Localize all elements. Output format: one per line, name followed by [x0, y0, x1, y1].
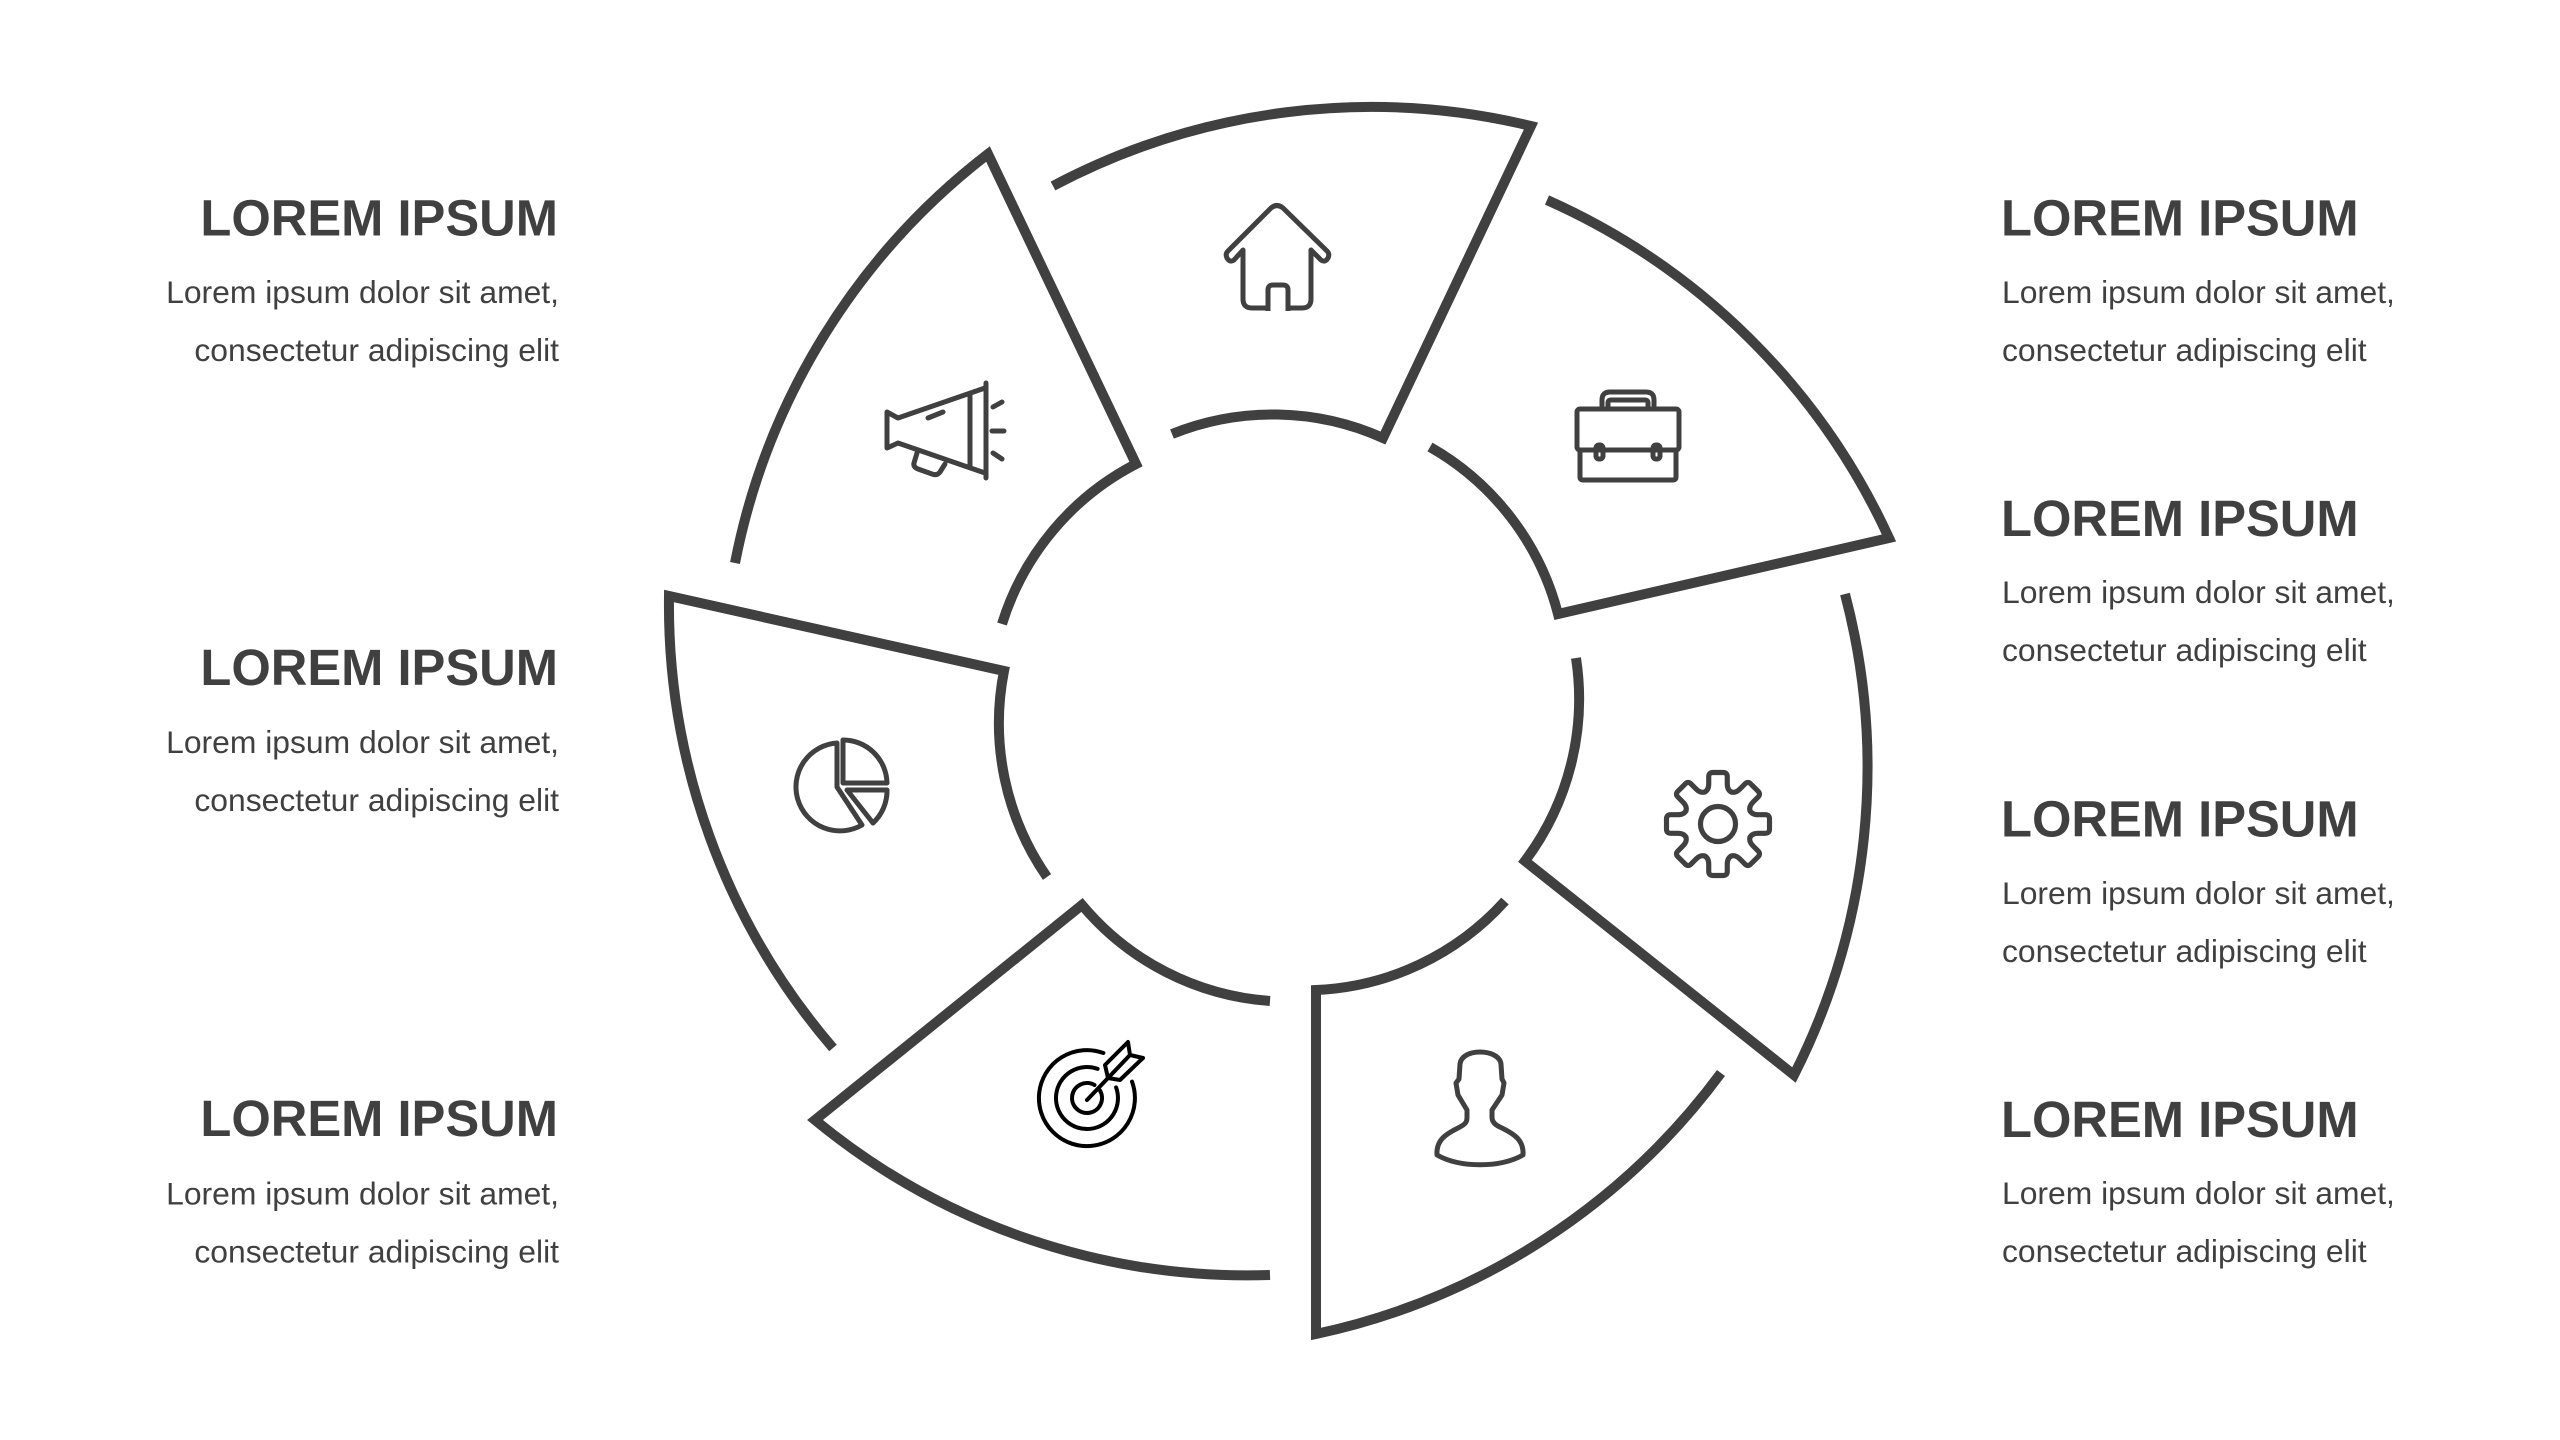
text block: left middle: LOREM IPSUM: [200, 639, 558, 696]
text block: left bottom: LOREM IPSUM: [200, 1090, 558, 1147]
panel: segment pie: [669, 596, 1047, 1048]
icon: house: [1226, 206, 1329, 311]
text block: left top: consectetur adipiscing elit: [194, 332, 559, 368]
text block: left bottom: [166, 1090, 559, 1270]
text block: right 3: consectetur adipiscing elit: [2002, 933, 2367, 969]
text block: right 4: Lorem ipsum dolor sit amet,: [2002, 1175, 2395, 1211]
text block: left top: [166, 190, 559, 368]
panel: segment briefcase: [1430, 200, 1889, 614]
text block: right 4: [2001, 1091, 2395, 1269]
text block: right 2: Lorem ipsum dolor sit amet,: [2002, 574, 2395, 610]
text block: right 2: LOREM IPSUM: [2001, 490, 2359, 547]
text block: right 4: LOREM IPSUM: [2001, 1091, 2359, 1148]
panel: segment house: [1053, 107, 1531, 438]
text block: right 1: consectetur adipiscing elit: [2002, 332, 2367, 368]
text block: right 2: [2001, 490, 2395, 668]
icon: briefcase: [1577, 392, 1679, 480]
text block: right 2: consectetur adipiscing elit: [2002, 632, 2367, 668]
text block: left top: Lorem ipsum dolor sit amet,: [166, 274, 559, 310]
icon: megaphone: [887, 383, 1004, 478]
panel: segment person: [1316, 901, 1721, 1334]
text block: right 3: Lorem ipsum dolor sit amet,: [2002, 875, 2395, 911]
text block: right 3: [2001, 790, 2395, 969]
text block: right 4: consectetur adipiscing elit: [2002, 1233, 2367, 1269]
text block: right 3: LOREM IPSUM: [2001, 790, 2359, 848]
text block: right 1: [2001, 190, 2395, 368]
panel: segment megaphone: [735, 154, 1136, 624]
text block: left middle: [166, 639, 559, 818]
text block: left middle: consectetur adipiscing elit: [194, 782, 559, 818]
text block: left bottom: consectetur adipiscing elit: [194, 1234, 559, 1270]
text block: left bottom: Lorem ipsum dolor sit amet,: [166, 1176, 559, 1212]
text block: left top: LOREM IPSUM: [200, 190, 558, 246]
icon: pie chart: [796, 740, 887, 831]
icon: person: [1437, 1052, 1523, 1165]
panel: segment target: [815, 905, 1270, 1275]
text block: right 1: LOREM IPSUM: [2001, 190, 2359, 246]
text block: left middle: Lorem ipsum dolor sit amet,: [166, 724, 559, 760]
icon: gear: [1666, 772, 1770, 876]
icon: target: [1039, 1042, 1143, 1146]
panel: segment gear: [1525, 594, 1868, 1075]
text block: right 1: Lorem ipsum dolor sit amet,: [2002, 274, 2395, 310]
